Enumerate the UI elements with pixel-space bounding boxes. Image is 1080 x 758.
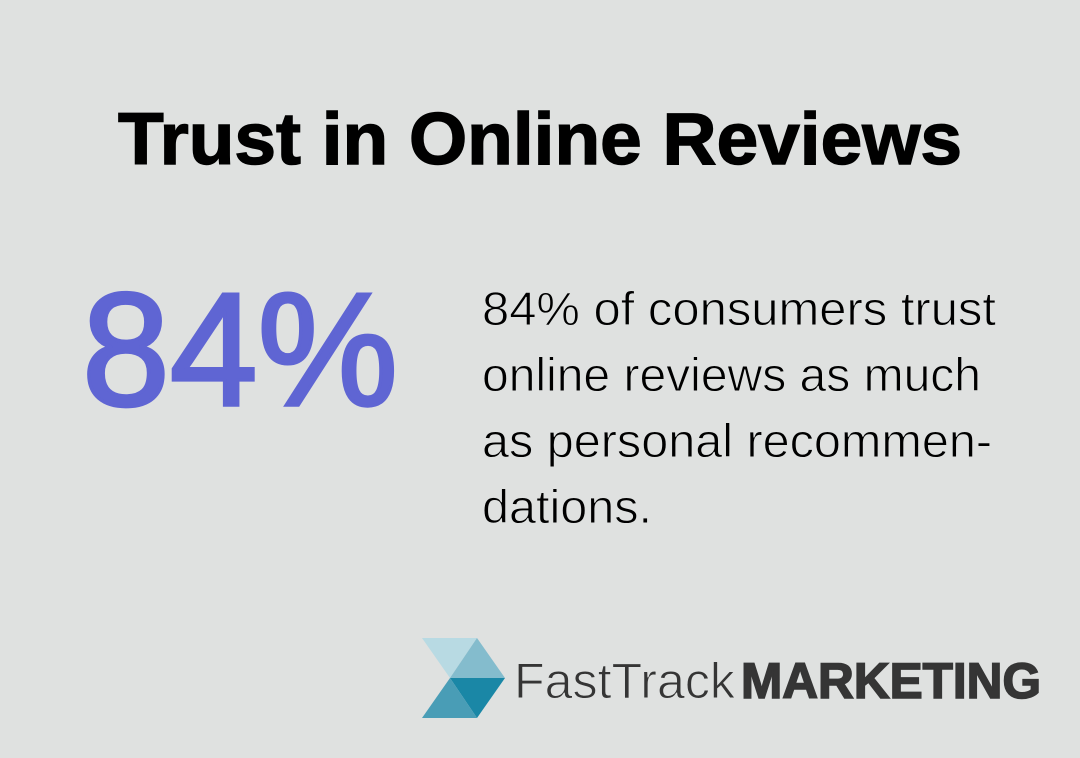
description text: dations. <box>482 480 652 533</box>
big statistic: 84% <box>82 260 398 440</box>
logo wordmark: FastTrack <box>514 653 736 709</box>
description text: as personal recommen- <box>482 414 992 467</box>
logo wordmark: MARKETING <box>741 653 1041 709</box>
title: Trust in Online Reviews <box>118 99 962 180</box>
logo: FastTrack Marketing <box>422 638 1041 718</box>
description text <box>482 282 996 533</box>
icon: logo triangles <box>422 638 505 718</box>
description text: 84% of consumers trust <box>482 282 996 335</box>
logo wordmark <box>514 653 1041 709</box>
description text: online reviews as much <box>482 348 981 401</box>
